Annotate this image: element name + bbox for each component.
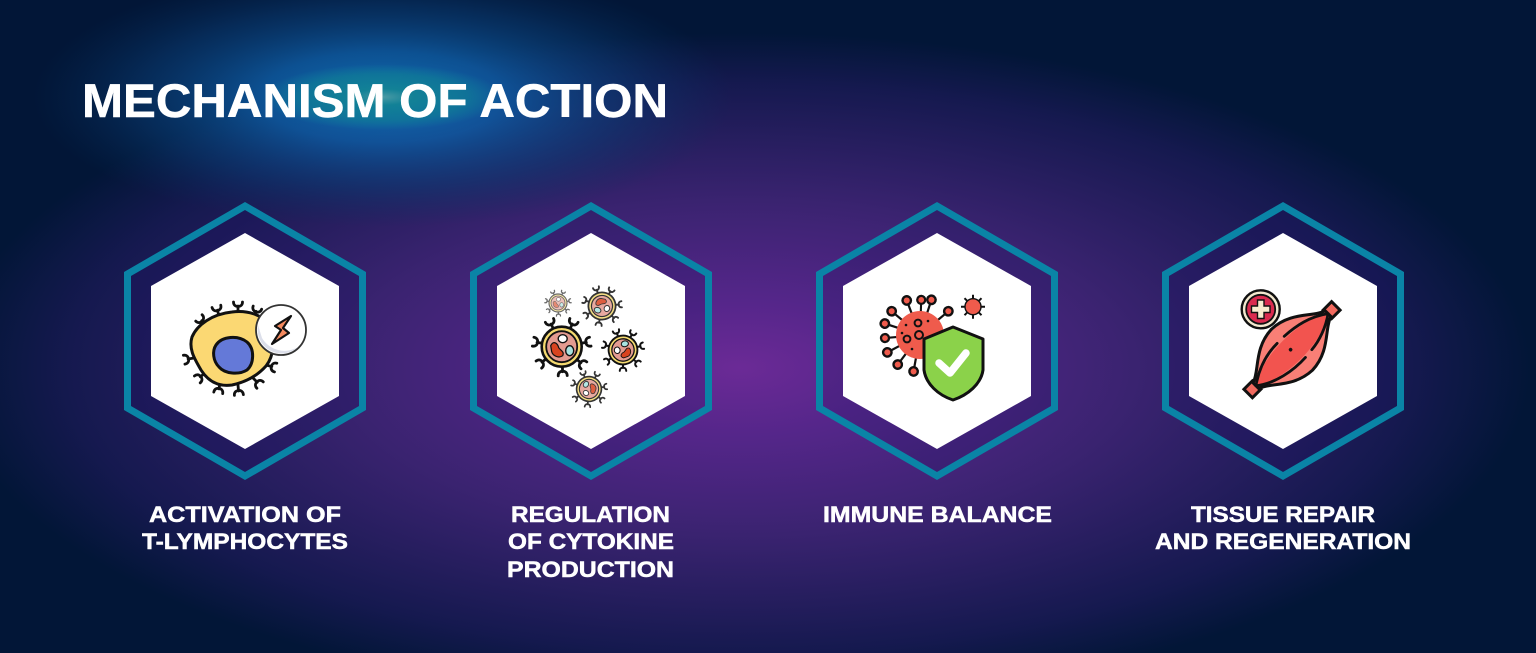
label: PRODUCTION bbox=[507, 557, 674, 582]
hexagon frame bbox=[128, 206, 362, 476]
icon: virus and shield bbox=[880, 295, 985, 400]
label bbox=[1155, 502, 1411, 554]
panel: tissue repair and regeneration bbox=[1155, 206, 1411, 554]
panel: regulation of cytokine production bbox=[474, 206, 708, 582]
label: OF CYTOKINE bbox=[508, 529, 674, 554]
icon: T cell with lightning badge bbox=[183, 302, 306, 395]
title: MECHANISM OF ACTION bbox=[82, 74, 668, 127]
label bbox=[507, 502, 674, 582]
label: IMMUNE BALANCE bbox=[823, 502, 1052, 527]
hexagon frame bbox=[474, 206, 708, 476]
panel: immune balance bbox=[820, 206, 1054, 527]
label: AND REGENERATION bbox=[1155, 529, 1411, 554]
label: T-LYMPHOCYTES bbox=[142, 529, 348, 554]
white hexagon bbox=[497, 233, 685, 449]
white hexagon bbox=[151, 233, 339, 449]
label bbox=[142, 502, 348, 554]
label: ACTIVATION OF bbox=[149, 502, 341, 527]
panel: activation of T-lymphocytes bbox=[128, 206, 362, 554]
icon: cytokine cells bbox=[532, 280, 647, 413]
icon: muscle with medical badge bbox=[1228, 285, 1356, 414]
label: TISSUE REPAIR bbox=[1191, 502, 1375, 527]
hexagon frame bbox=[820, 206, 1054, 476]
label: REGULATION bbox=[511, 502, 670, 527]
hexagon frame bbox=[1166, 206, 1400, 476]
white hexagon bbox=[1189, 233, 1377, 449]
white hexagon bbox=[843, 233, 1031, 449]
